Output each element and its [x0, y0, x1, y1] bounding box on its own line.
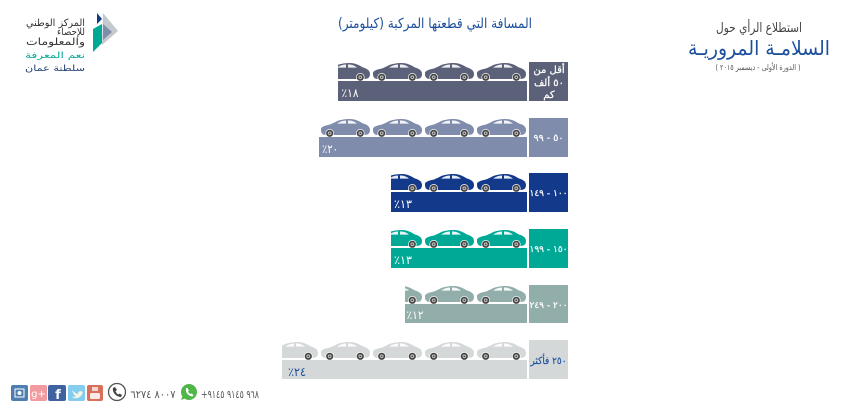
logo text: سلطنة عمان [25, 64, 85, 74]
percentage: ١٣٪ [394, 253, 413, 267]
percentage: ٢٤٪ [288, 365, 306, 379]
row: 200-249, 12% [405, 285, 568, 323]
logo text: للإحصاء [57, 27, 85, 38]
category label [529, 118, 568, 157]
survey heading [688, 19, 830, 72]
category label: ٢٠٠ - ٢٤٩ [529, 301, 568, 311]
row: less than 50 thousand km, 18% [321, 62, 568, 101]
icon: youtube [87, 385, 103, 401]
logo: national centre for statistics [25, 13, 118, 74]
category label: ٥٠ - ٩٩ [534, 133, 563, 144]
icon: google plus [30, 385, 47, 401]
category label [529, 173, 568, 212]
cars [391, 174, 526, 192]
percentage: ١٣٪ [394, 197, 413, 211]
cars [269, 342, 526, 361]
icon: facebook [48, 385, 66, 403]
percentage: ٢٠٪ [322, 142, 338, 156]
bar [405, 304, 527, 323]
category label [529, 229, 568, 268]
category label [529, 340, 568, 379]
logo text: نعم المعرفة [25, 51, 85, 61]
icon: whatsapp [181, 384, 197, 400]
icon: instagram [11, 385, 28, 401]
logo text [25, 18, 85, 74]
icon: facebook: f [55, 388, 61, 403]
cars [391, 230, 526, 248]
row: 250 and over, 24% [269, 340, 568, 379]
row: 150-199, 13% [373, 229, 568, 268]
cars [321, 119, 526, 138]
icon: telephone [108, 384, 126, 400]
logo text: والمعلومات [26, 37, 85, 48]
chart title: المسافة التي قطعتها المركبة (كيلومتر) [338, 16, 532, 32]
contact footer [11, 384, 259, 403]
cars [338, 63, 526, 81]
heading line 2: السلامـة المروريـة [688, 36, 830, 60]
survey edition: ( الدورة الأولى - ديسمبر ٢٠١٥ ) [716, 62, 800, 72]
category label: كم [543, 90, 555, 101]
category label: ٢٥٠ فأكثر [530, 353, 566, 367]
category label: ١٥٠ - ١٩٩ [529, 245, 568, 255]
percentage: ١٢٪ [406, 308, 424, 322]
category label: ٥٠ ألف [534, 76, 564, 89]
bar [282, 360, 527, 379]
bar [391, 192, 527, 212]
row: 50-99, 20% [319, 118, 568, 157]
category label [529, 62, 568, 101]
row: 100-149, 13% [373, 173, 568, 212]
bar [319, 137, 527, 157]
category label: أقل من [533, 63, 565, 76]
logo text: المركز الوطني [26, 18, 85, 29]
icon: google plus: g+ [31, 389, 46, 400]
heading line 1: استطلاع الرأي حول [716, 19, 802, 36]
bar [391, 248, 527, 268]
percentage: ١٨٪ [342, 86, 359, 100]
bar [338, 81, 527, 101]
whatsapp number: +٩٦٨ ٩١٤٥ ٩١٤٥ [201, 388, 259, 401]
cars [405, 286, 526, 304]
logo mark [93, 13, 118, 52]
toll-free number: ٨٠٠٧ ٦٢٧٤ [130, 388, 176, 401]
category label: ١٠٠ - ١٤٩ [529, 189, 568, 199]
category label [529, 285, 568, 323]
icon: twitter [68, 385, 85, 401]
